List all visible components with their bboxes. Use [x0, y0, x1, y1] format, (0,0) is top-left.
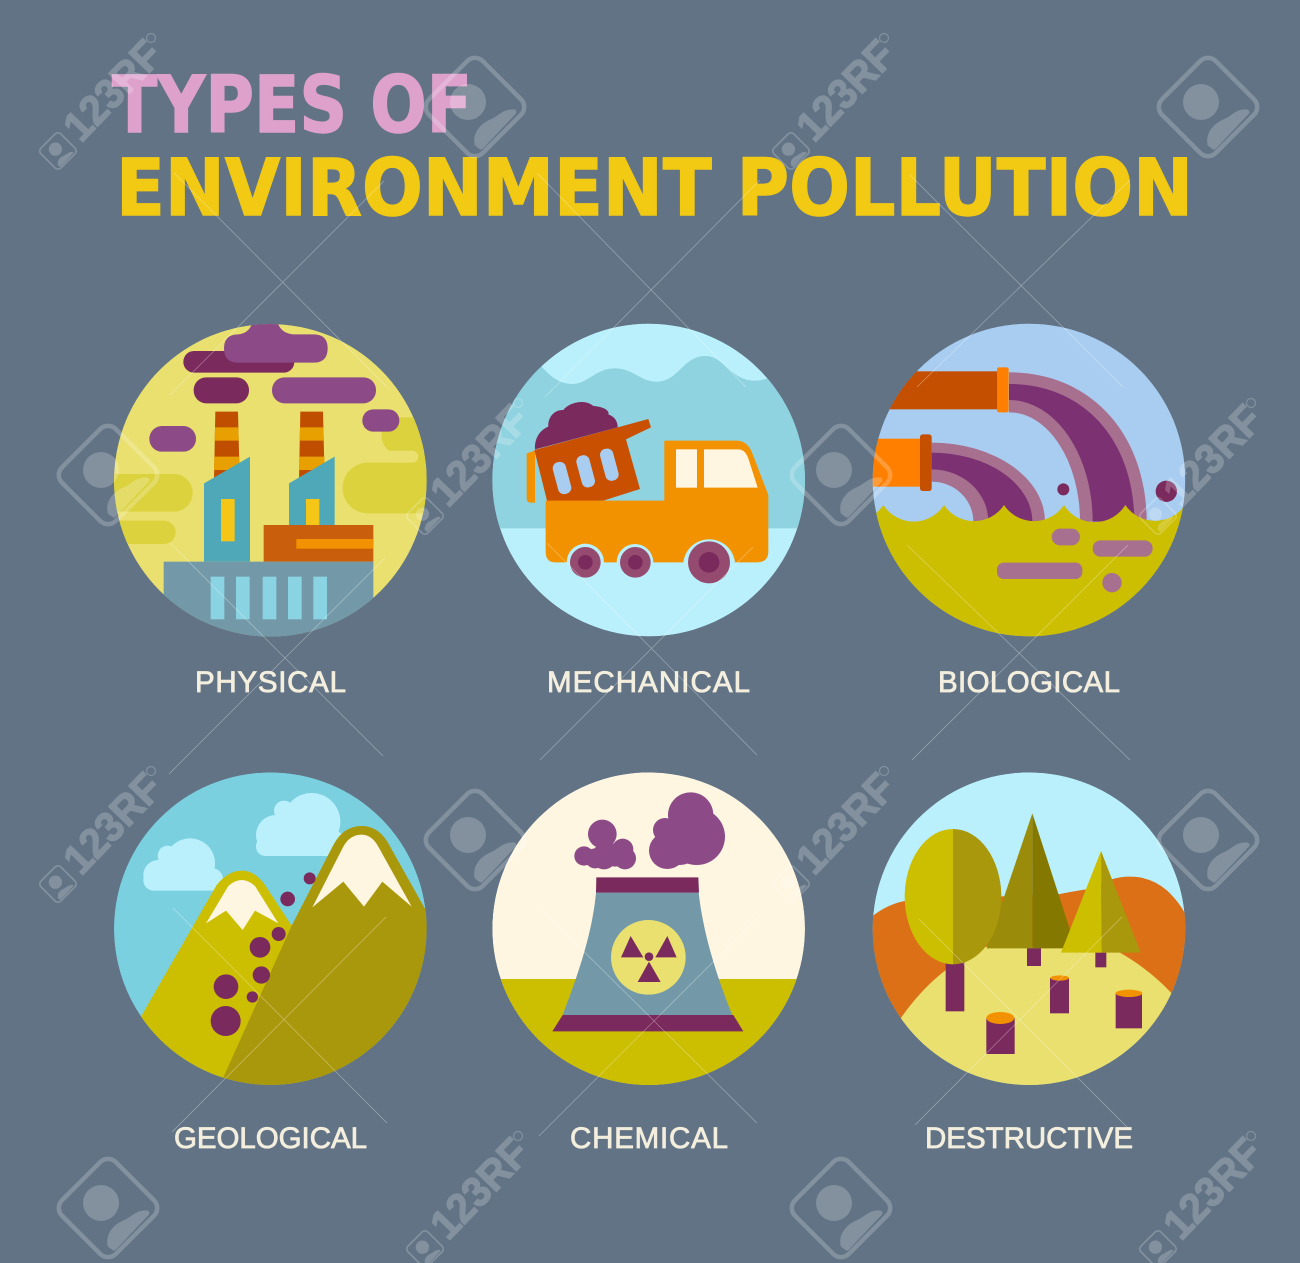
panel: biological — [872, 324, 1186, 693]
icon: mountains — [114, 772, 433, 1093]
icon: nuclear cooling tower — [492, 772, 805, 1085]
panel: physical — [114, 324, 427, 693]
label: geological: GEOLOGICAL — [174, 1122, 367, 1155]
label: destructive: DESTRUCTIVE — [925, 1122, 1133, 1155]
panel: mechanical — [480, 324, 813, 699]
watermark grid lines — [169, 173, 1130, 1136]
icon: factory — [114, 324, 427, 637]
title: ENVIRONMENT POLLUTION — [116, 144, 1193, 234]
icon: sewage pipes — [872, 324, 1186, 636]
label: biological: BIOLOGICAL — [938, 666, 1120, 699]
label: chemical: CHEMICAL — [570, 1122, 728, 1155]
icon: forest and stumps — [860, 772, 1193, 1093]
label: physical: PHYSICAL — [195, 666, 346, 699]
label: mechanical: MECHANICAL — [547, 666, 750, 699]
title — [112, 61, 1193, 234]
panel: chemical — [480, 772, 820, 1155]
panel: geological — [114, 772, 433, 1155]
icon: dump truck — [480, 324, 813, 636]
title: TYPES OF — [112, 61, 472, 151]
panel: destructive — [860, 772, 1193, 1155]
